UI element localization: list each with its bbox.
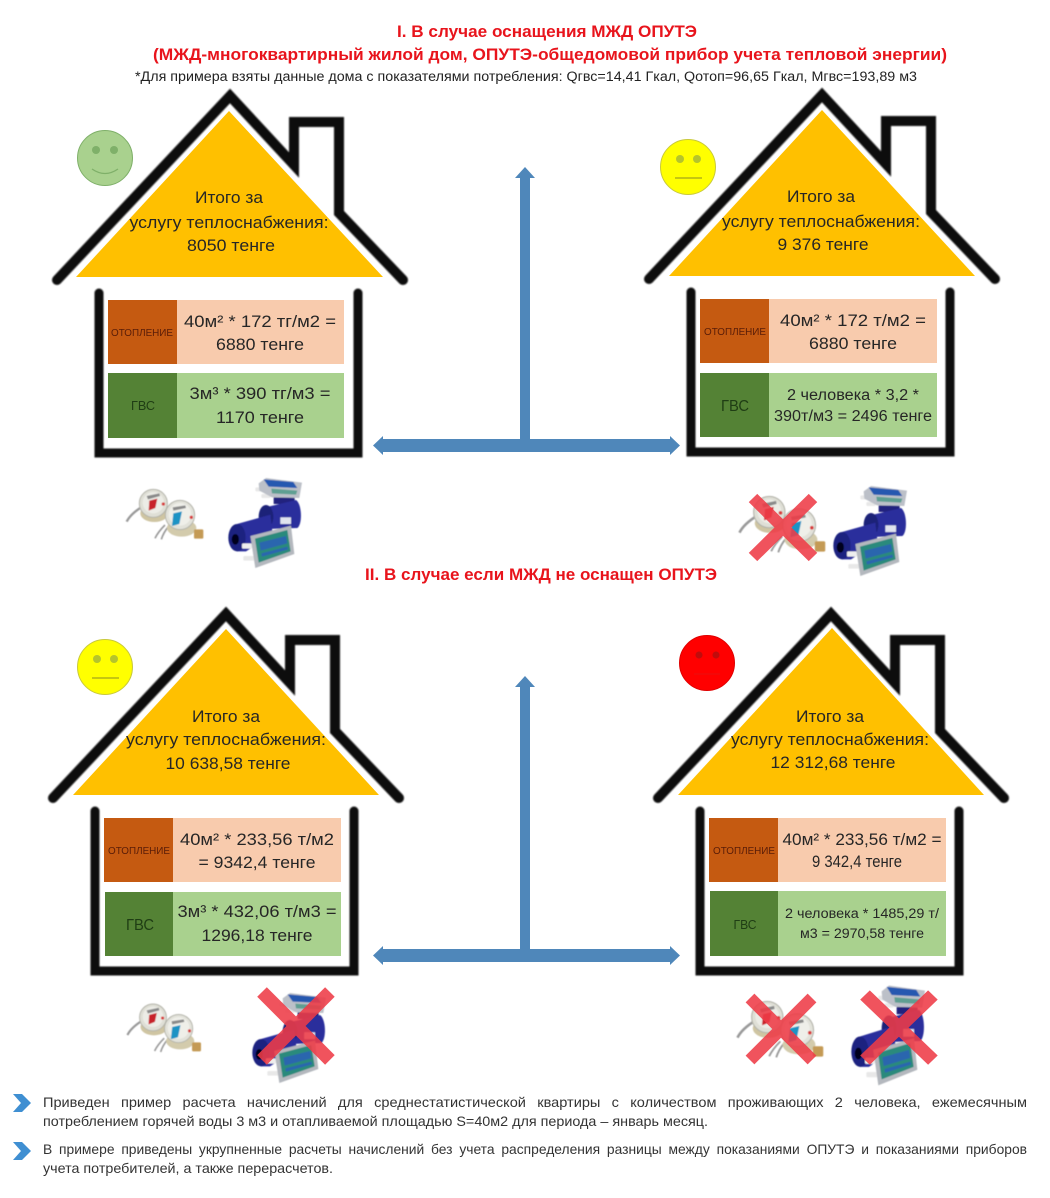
icon: red smiley bbox=[680, 636, 734, 690]
row: heating: 6880 тенге bbox=[809, 334, 897, 353]
row: hot water bbox=[710, 891, 946, 956]
row: hot water: 2 человека * 1485,29 т/ bbox=[785, 906, 939, 921]
row: heating: 9 342,4 тенге bbox=[812, 852, 902, 871]
icon: water meters bbox=[127, 1004, 201, 1052]
total text: услугу теплоснабжения: bbox=[130, 213, 328, 232]
section heading II: II. В случае если МЖД не оснащен ОПУТЭ bbox=[365, 566, 717, 584]
bullet note 2 bbox=[13, 1141, 1027, 1176]
house outline bbox=[649, 95, 995, 452]
house 1: with both meters bbox=[57, 96, 403, 453]
row: hot water: 390т/м3 = 2496 тенге bbox=[774, 408, 932, 425]
row: heating bbox=[108, 300, 344, 364]
bullet note 2: учета потребителей, а также перерасчетов. bbox=[43, 1160, 333, 1176]
icon: heat meter bbox=[833, 486, 907, 576]
devices: house 3 bbox=[127, 992, 330, 1083]
house outline bbox=[57, 96, 403, 453]
arrows: lower comparison bbox=[373, 676, 680, 965]
row: heating: 40м² * 233,56 т/м2 bbox=[180, 830, 334, 849]
house outline bbox=[658, 614, 1004, 971]
icon: water meters bbox=[127, 489, 203, 539]
row: heating bbox=[104, 818, 341, 882]
total text: 12 312,68 тенге bbox=[770, 753, 896, 772]
icon: chevron bbox=[13, 1094, 31, 1112]
title: section I bbox=[153, 23, 947, 64]
total text bbox=[126, 707, 326, 773]
total text: услугу теплоснабжения: bbox=[126, 730, 326, 749]
icon: yellow smiley bbox=[78, 640, 132, 694]
total text: Итого за bbox=[195, 188, 264, 207]
total text: Итого за bbox=[787, 187, 856, 206]
total text: услугу теплоснабжения: bbox=[722, 212, 920, 231]
title: section I: I. В случае оснащения МЖД ОПУТЭ bbox=[397, 23, 697, 41]
row: hot water bbox=[105, 892, 341, 956]
row: heating: 40м² * 172 тг/м2 = bbox=[184, 312, 336, 331]
row: hot water: 1296,18 тенге bbox=[202, 926, 312, 945]
row: heating: ОТОПЛЕНИЕ bbox=[704, 326, 766, 338]
total text bbox=[722, 187, 920, 254]
roof triangle bbox=[678, 628, 984, 795]
total text: 10 638,58 тенге bbox=[166, 754, 290, 773]
row: heating bbox=[700, 299, 937, 363]
arrows: upper comparison bbox=[373, 167, 680, 455]
house outline bbox=[53, 614, 399, 971]
icon: crossed-out water meters bbox=[737, 998, 823, 1060]
icon: crossed-out heat meter bbox=[252, 992, 330, 1083]
row: hot water: 1170 тенге bbox=[216, 408, 304, 427]
row: hot water: 3м³ * 432,06 т/м3 = bbox=[178, 902, 337, 921]
title: section I: (МЖД-многоквартирный жилой дом, ОПУТЭ-общедомовой прибор учета тепловой энергии) bbox=[153, 46, 947, 64]
row: hot water: 3м³ * 390 тг/м3 = bbox=[190, 384, 331, 403]
roof triangle bbox=[73, 629, 379, 795]
icon: heat meter bbox=[228, 478, 302, 568]
row: hot water: ГВС bbox=[126, 917, 154, 934]
row: heating: ОТОПЛЕНИЕ bbox=[108, 845, 170, 857]
icon: crossed-out water meters bbox=[739, 496, 825, 557]
total text: Итого за bbox=[192, 707, 261, 726]
bullet note 1 bbox=[13, 1094, 1027, 1129]
row: heating: ОТОПЛЕНИЕ bbox=[111, 327, 173, 339]
house 3: meter without building meter bbox=[53, 614, 399, 971]
row: hot water bbox=[700, 373, 937, 437]
total text: Итого за bbox=[796, 707, 865, 726]
row: heating: = 9342,4 тенге bbox=[198, 853, 316, 872]
icon: chevron bbox=[13, 1142, 31, 1160]
row: hot water: ГВС bbox=[734, 917, 756, 932]
row: heating: 6880 тенге bbox=[216, 335, 304, 354]
total text: 9 376 тенге bbox=[778, 235, 868, 254]
icon: crossed-out heat meter bbox=[851, 985, 933, 1085]
house 2: no apartment meter bbox=[649, 95, 995, 452]
icon: yellow smiley bbox=[660, 140, 716, 194]
roof triangle bbox=[669, 110, 975, 276]
devices: house 2 bbox=[739, 486, 907, 576]
row: heating: 40м² * 172 т/м2 = bbox=[780, 311, 926, 330]
total text: услугу теплоснабжения: bbox=[731, 730, 929, 749]
bullet note 2: В примере приведены укрупненные расчеты начислений без учета распределения разницы между показаниями ОПУТЭ и показаниями приборов bbox=[43, 1141, 1027, 1157]
row: hot water: ГВС bbox=[721, 398, 749, 415]
row: heating: ОТОПЛЕНИЕ bbox=[713, 845, 775, 857]
total text: 8050 тенге bbox=[187, 236, 275, 255]
row: hot water bbox=[108, 373, 344, 438]
house 4: no meters bbox=[658, 614, 1004, 971]
total text bbox=[130, 188, 328, 255]
bullet note 1: Приведен пример расчета начислений для среднестатистической квартиры с количеством проживающих 2 человека, ежемесячным bbox=[43, 1094, 1027, 1110]
row: heating: 40м² * 233,56 т/м2 = bbox=[782, 830, 942, 849]
bullet note 1: потреблением горячей воды 3 м3 и отапливаемой площадью S=40м2 для периода – январь месяц. bbox=[43, 1113, 708, 1129]
row: hot water: ГВС bbox=[131, 398, 155, 413]
roof triangle bbox=[76, 111, 383, 277]
row: hot water: м3 = 2970,58 тенге bbox=[800, 926, 924, 941]
row: heating bbox=[709, 818, 946, 882]
icon: green smiley bbox=[78, 130, 132, 186]
footnote: source data: *Для примера взяты данные дома с показателями потребления: Qгвс=14,41 Гкал, Qотоп=96,65 Гкал, Мгвс=193,89 м3 bbox=[135, 69, 917, 84]
total text bbox=[731, 707, 929, 772]
devices: house 4 bbox=[737, 985, 933, 1085]
row: hot water: 2 человека * 3,2 * bbox=[787, 387, 919, 404]
devices: house 1 bbox=[127, 478, 302, 568]
